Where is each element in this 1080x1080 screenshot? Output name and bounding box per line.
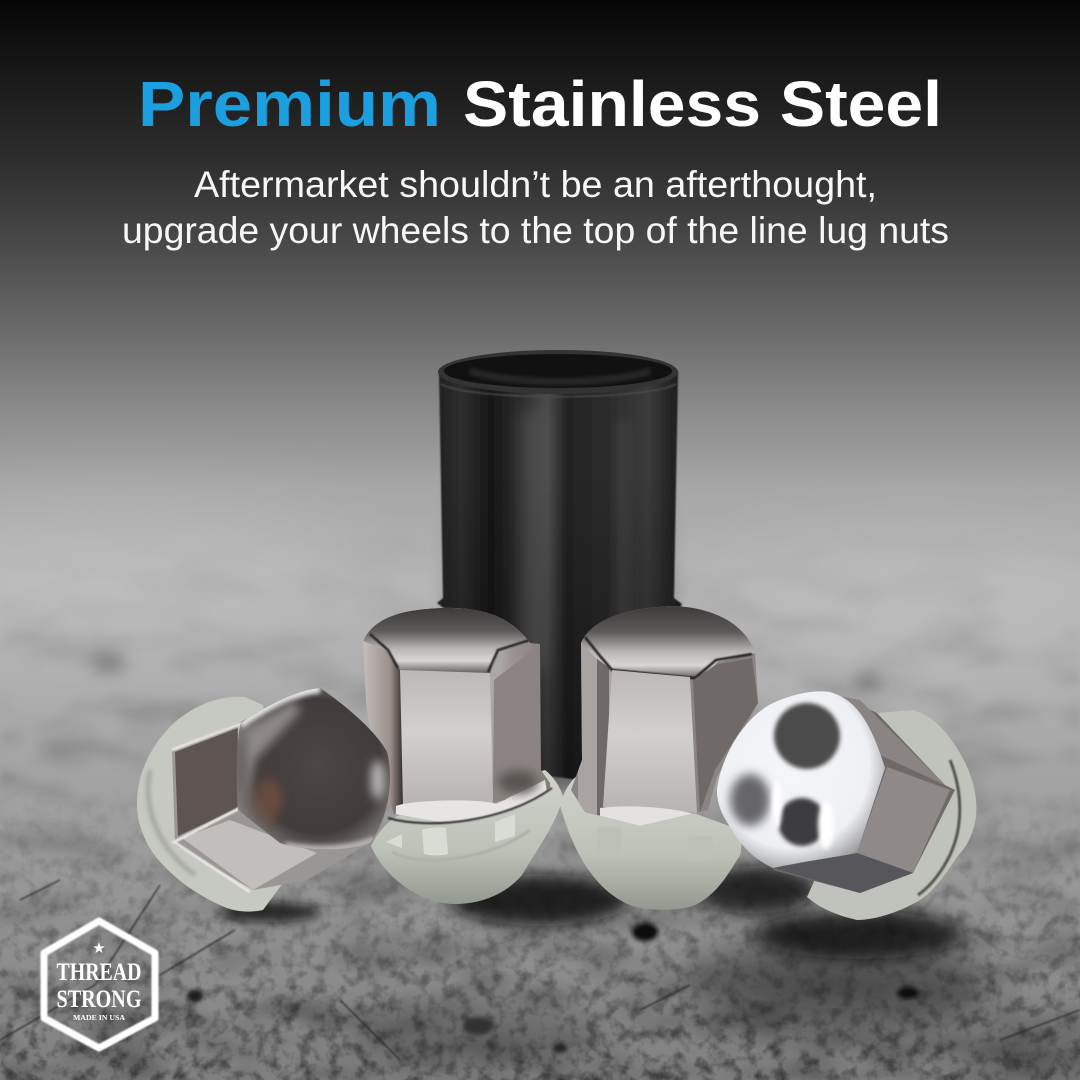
flange [137, 697, 300, 912]
hex and lower facets [172, 688, 390, 890]
dome [236, 688, 390, 850]
lug nut: center left [360, 600, 563, 904]
lower facet [773, 853, 913, 893]
chrome edges [172, 724, 250, 892]
logo wordmark [56, 959, 142, 1022]
front face [603, 670, 697, 813]
hex body [773, 692, 955, 893]
subtitle: upgrade your wheels to the top of the line lug nuts [122, 210, 949, 251]
logo wordmark: STRONG [56, 986, 142, 1013]
dome [717, 691, 885, 868]
hexagon outline [44, 921, 155, 1048]
front face [400, 670, 493, 807]
lug nut: far right, on its side [710, 685, 976, 920]
subtitle: Aftermarket shouldn’t be an afterthought, [194, 164, 877, 205]
title: Premium [138, 68, 441, 140]
title [138, 68, 942, 140]
front facet [857, 767, 950, 873]
dark reflection [774, 703, 840, 769]
lug nut: far left, on its side [137, 680, 400, 912]
top facet [835, 695, 945, 785]
lower bright facet [182, 820, 317, 890]
lug nut: center right [560, 600, 765, 910]
side facet [175, 728, 238, 836]
star: ★ [92, 940, 106, 957]
logo: Thread Strong [44, 921, 155, 1048]
cap top [363, 608, 530, 674]
logo wordmark: MADE IN USA [73, 1014, 125, 1022]
zinc flange [371, 770, 563, 904]
chrome body [360, 600, 552, 830]
chrome body [571, 606, 758, 826]
zinc flange [560, 772, 742, 910]
logo wordmark: THREAD [56, 959, 142, 986]
title: Stainless Steel [463, 68, 942, 140]
flange [807, 710, 976, 920]
cap top [581, 606, 755, 680]
socket key [437, 350, 682, 790]
subtitle [122, 164, 949, 251]
lower ring highlight [396, 780, 547, 822]
